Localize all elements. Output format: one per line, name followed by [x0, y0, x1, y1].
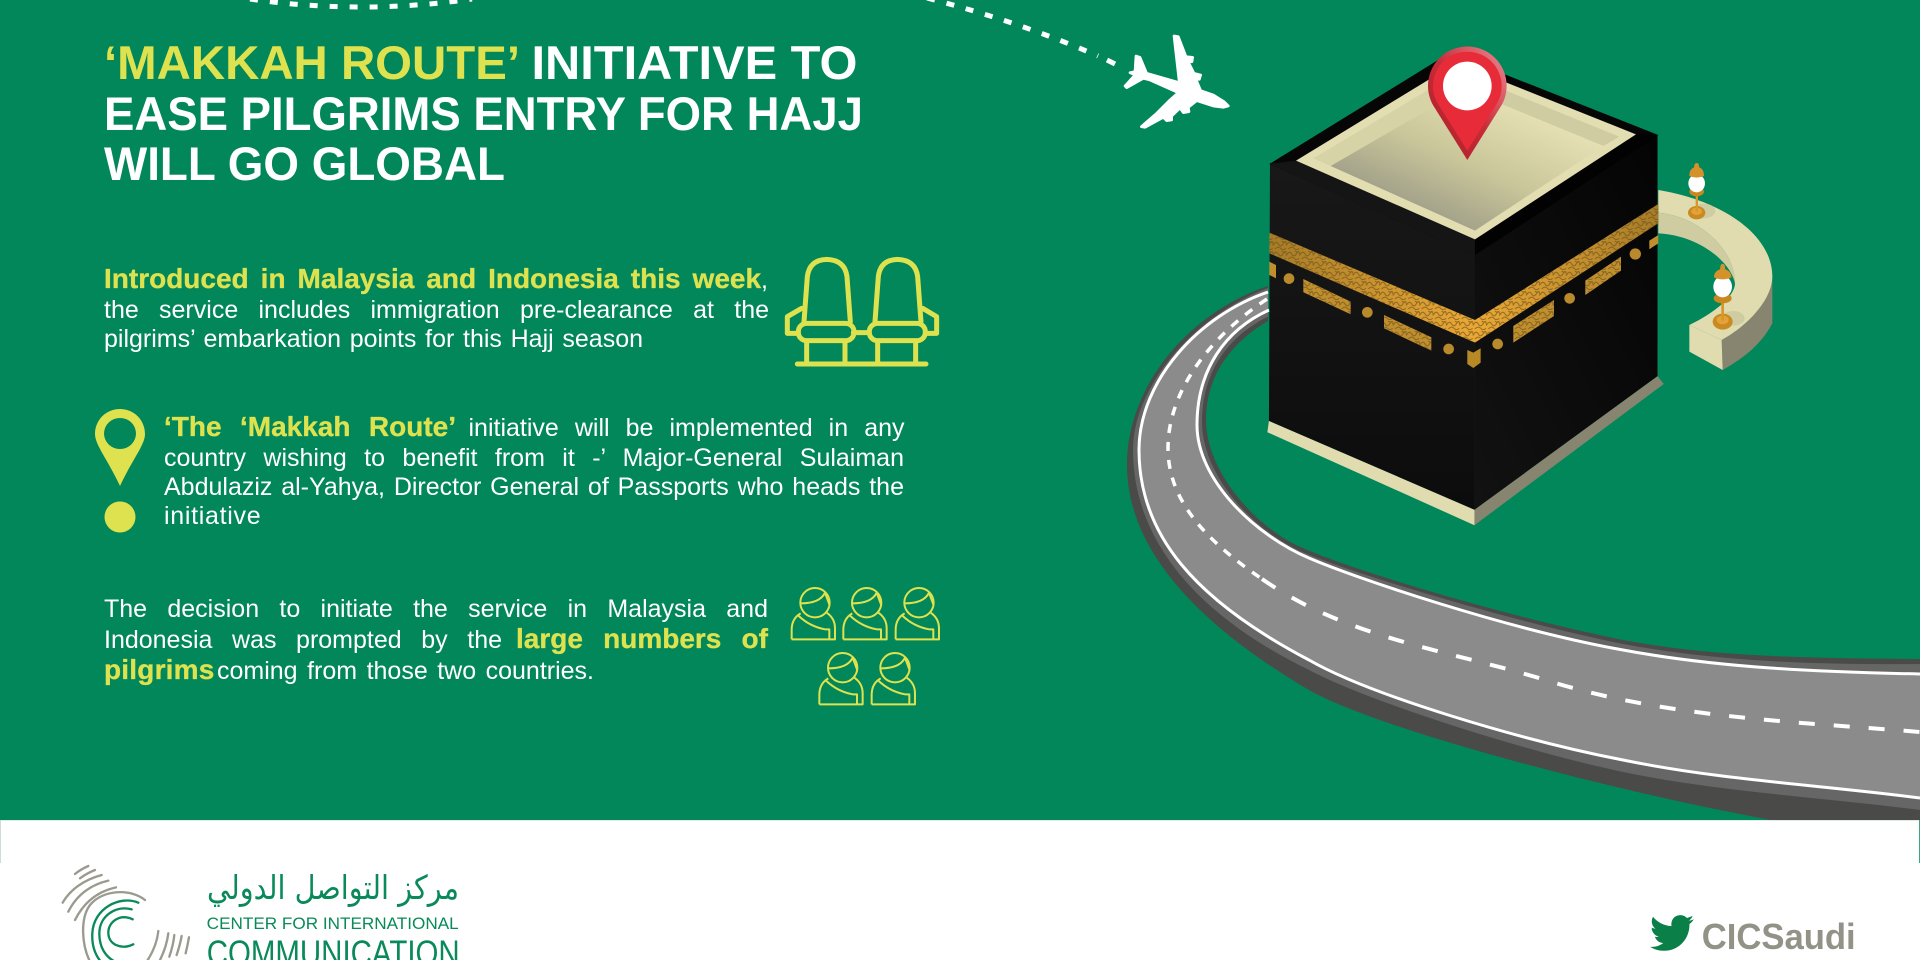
icon: airplane	[1125, 36, 1228, 127]
text block: decision and large numbers of pilgrims: large numbers of	[516, 623, 768, 654]
text block: introduced in Malaysia and Indonesia	[104, 263, 769, 353]
icon: airplane seats	[787, 259, 937, 364]
curved Hijr Ismail wall	[1658, 163, 1772, 370]
text block: Makkah Route implementation	[164, 411, 904, 530]
text block: Makkah Route implementation: initiative	[164, 502, 261, 530]
text block: decision and large numbers of pilgrims: Indonesia was prompted by the	[104, 626, 502, 654]
logo text: CENTER FOR INTERNATIONAL	[207, 914, 459, 933]
title: EASE PILGRIMS ENTRY FOR HAJJ	[104, 87, 863, 140]
text block: decision and large numbers of pilgrims: pilgrims	[104, 654, 215, 685]
logo text: مركز التواصل الدولي	[207, 868, 459, 907]
icon: location pin and dot	[95, 409, 145, 532]
Kaaba base and faces	[1267, 135, 1664, 525]
title: ‘MAKKAH ROUTE’	[104, 36, 520, 89]
title	[104, 36, 863, 190]
text block: Makkah Route implementation: country wishing to benefit from it -’ Major-General Sulaiman	[164, 444, 904, 472]
Kaaba roof and gold kiswa band	[1269, 53, 1658, 368]
lamp: upper	[1688, 163, 1715, 219]
icon: group of pilgrims	[792, 588, 939, 704]
logo: concentric fingerprint mark	[63, 866, 189, 960]
text block: Makkah Route implementation: ‘The ‘Makkah Route’	[164, 411, 456, 442]
logo text	[207, 868, 460, 960]
text block: introduced in Malaysia and Indonesia: the service includes immigration pre-clearance at the	[104, 296, 769, 324]
text block: Makkah Route implementation: initiative will be implemented in any	[468, 414, 904, 442]
text block: Makkah Route implementation: Abdulaziz al-Yahya, Director General of Passports who heads the	[164, 473, 904, 501]
title: WILL GO GLOBAL	[104, 137, 505, 190]
text block: decision and large numbers of pilgrims: The decision to initiate the service in Malaysia and	[104, 595, 768, 623]
Kaaba	[1267, 53, 1664, 525]
twitter handle: CICSaudi	[1702, 916, 1856, 957]
footer panel	[0, 820, 1920, 960]
lamp: lower	[1713, 264, 1745, 330]
icon: red location pin	[1428, 47, 1507, 160]
text block: decision and large numbers of pilgrims	[104, 595, 768, 686]
dashed flight path	[250, 0, 1115, 64]
road	[1127, 240, 1920, 850]
text block: introduced in Malaysia and Indonesia: pilgrims’ embarkation points for this Hajj season	[104, 325, 643, 353]
text block: decision and large numbers of pilgrims: coming from those two countries.	[217, 657, 594, 685]
title: INITIATIVE TO	[532, 36, 858, 89]
text block: introduced in Malaysia and Indonesia: Introduced in Malaysia and Indonesia this week,	[104, 263, 768, 294]
icon: twitter bird	[1650, 915, 1694, 951]
